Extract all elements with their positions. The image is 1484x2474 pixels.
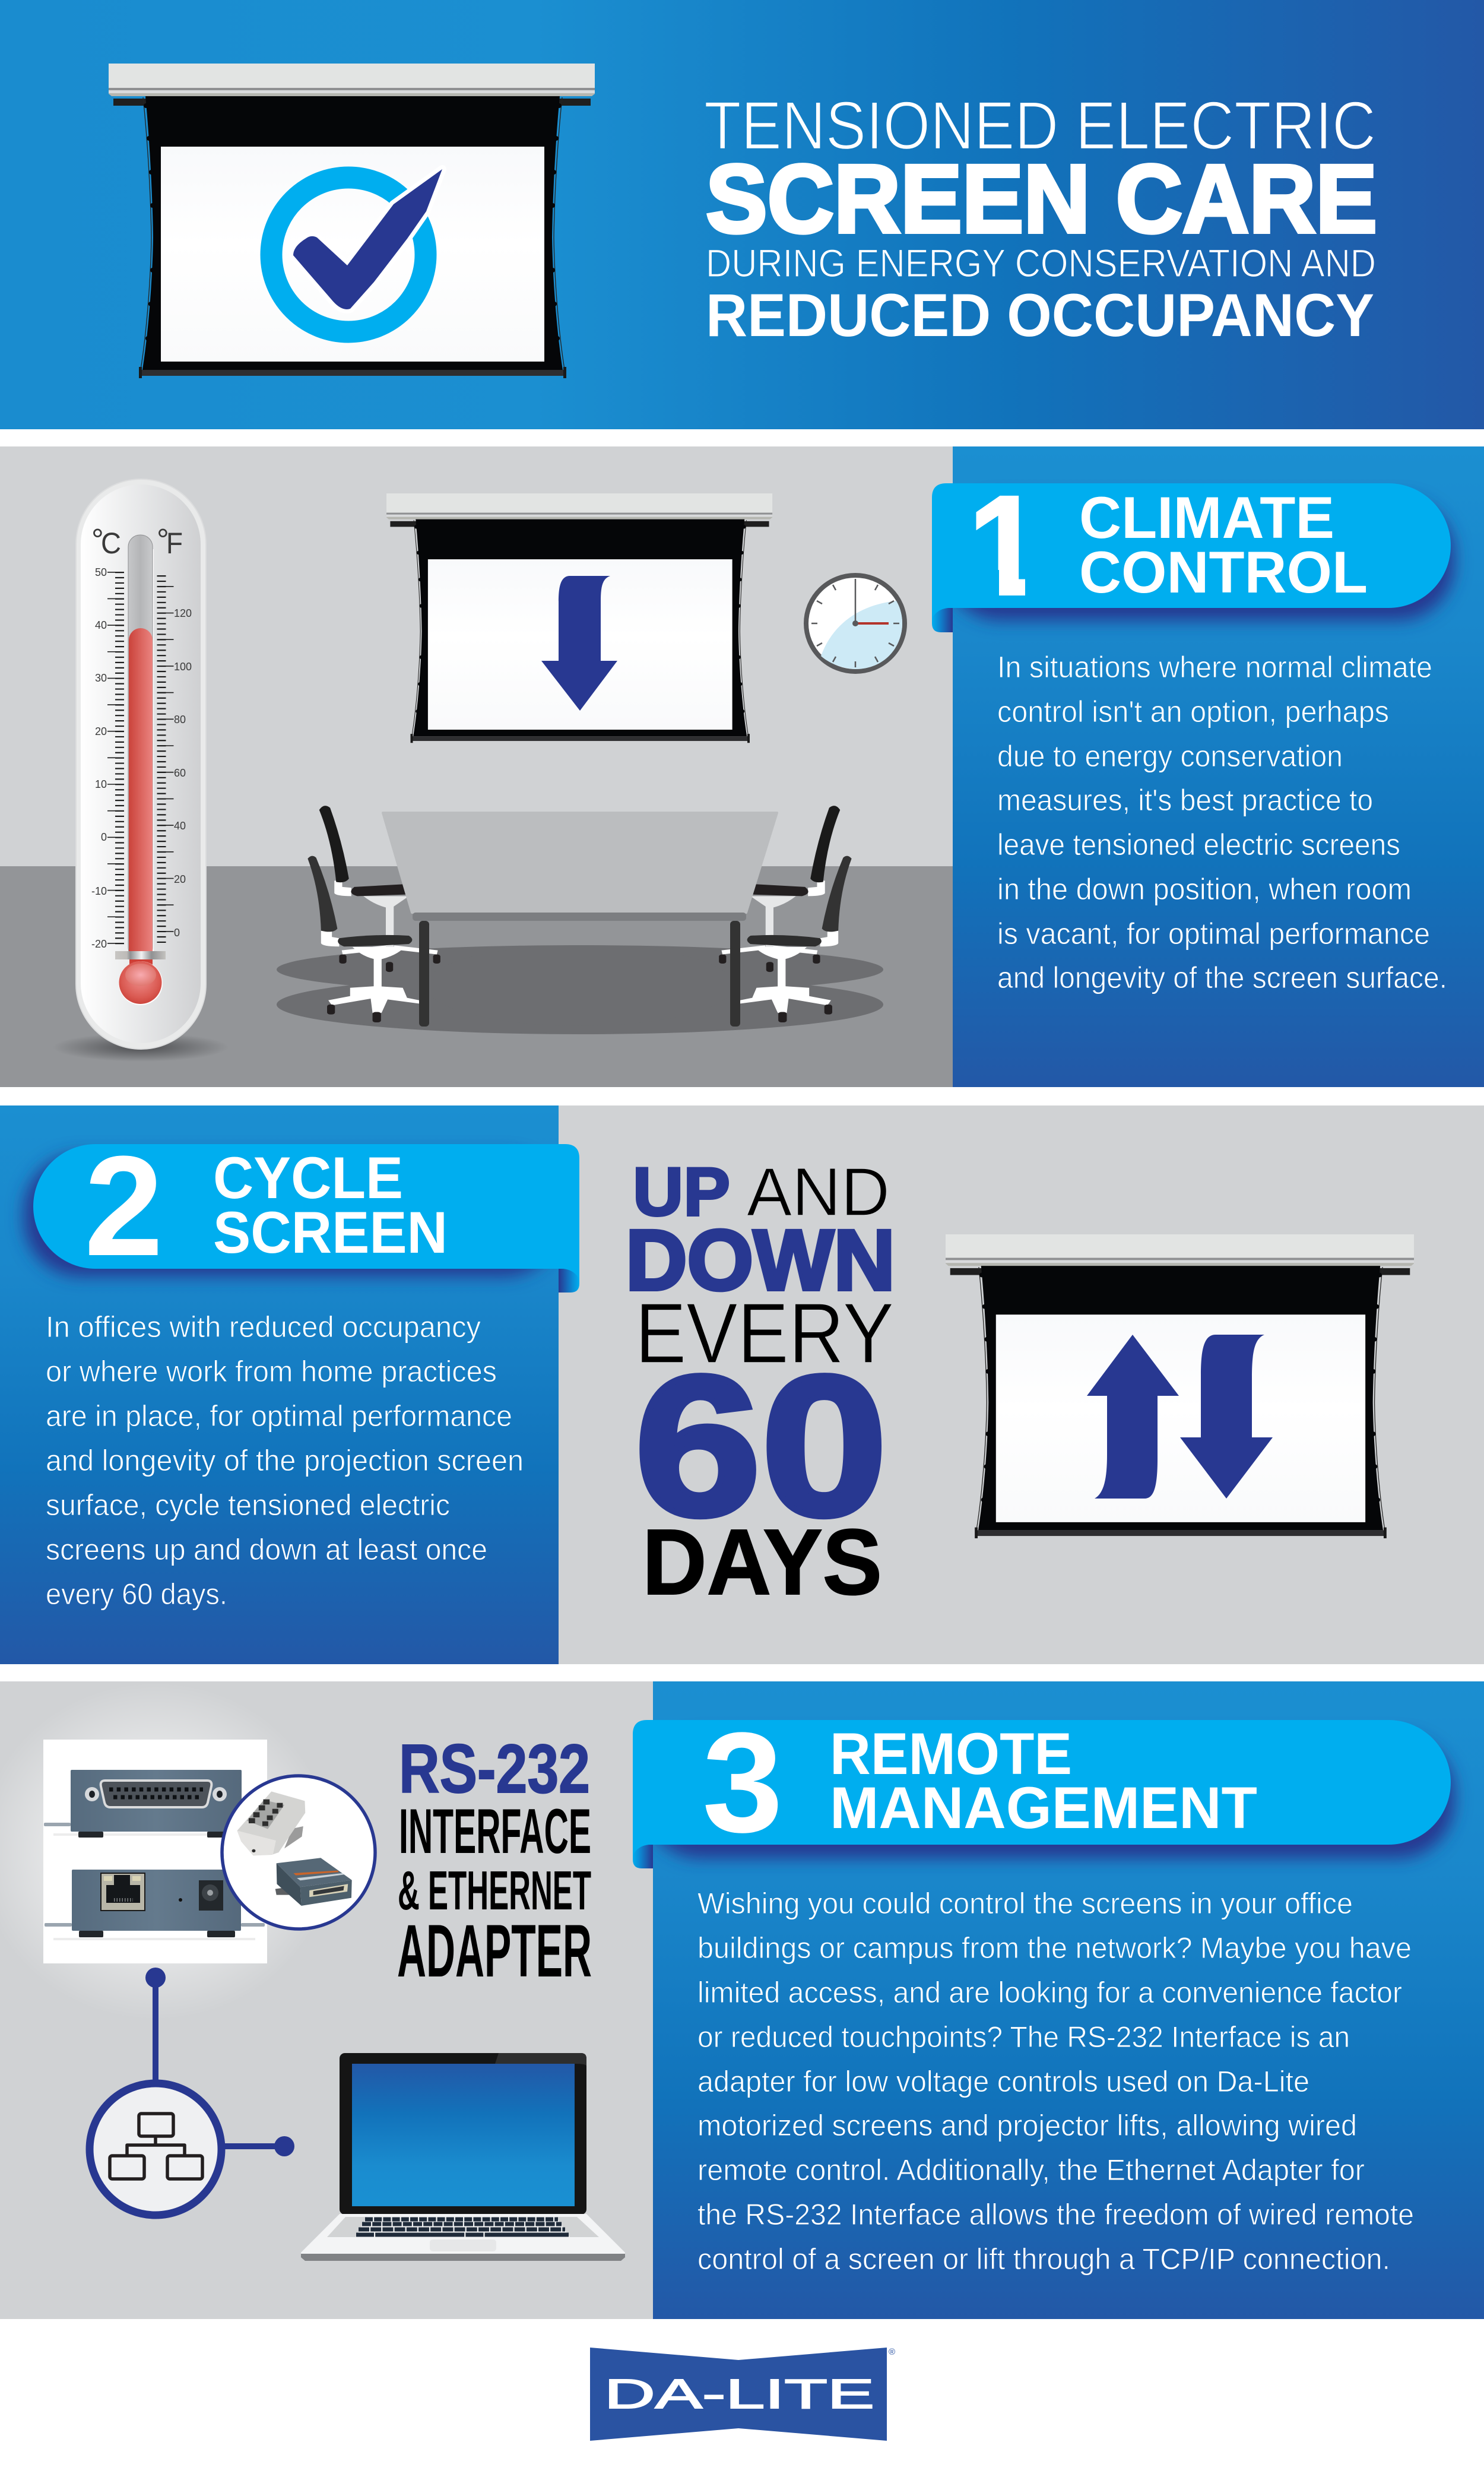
device: serial port <box>44 1770 255 1838</box>
scale labels: 120 <box>174 607 192 619</box>
device: ethernet adapter <box>275 1858 352 1906</box>
floor shadows <box>277 945 883 1034</box>
ribbon shadow <box>944 499 1454 620</box>
body text: climate control: leave tensioned electric screens <box>997 828 1400 861</box>
body text: remote management: or reduced touchpoints? The RS-232 Interface is an <box>697 2020 1350 2054</box>
panel: cycle screen <box>0 1105 1484 1664</box>
ribbon: heading 2: 2 <box>84 1126 163 1285</box>
body text: cycle screen <box>46 1310 524 1611</box>
ribbon: heading 1: 1 <box>968 466 1042 625</box>
scale labels: 30 <box>95 672 107 684</box>
device: ethernet port <box>45 1870 265 1940</box>
chairs left <box>307 806 440 1022</box>
icon: laptop <box>301 2053 625 2261</box>
panel: remote management <box>0 1681 1484 2319</box>
scale labels: 0 <box>101 831 107 843</box>
glow behind product photo <box>0 1682 334 2020</box>
body text: climate control: measures, it's best practice to <box>997 783 1373 817</box>
heading: RS-232 interface and ethernet adapter: & ETHERNET <box>398 1860 591 1921</box>
icon: projection screen with check mark <box>109 64 595 378</box>
scale labels: -10 <box>91 885 107 897</box>
callout: up and down every 60 days: DAYS <box>642 1510 882 1614</box>
title: REDUCED OCCUPANCY <box>706 281 1374 349</box>
body text: climate control: and longevity of the screen surface. <box>997 961 1447 994</box>
scale labels: 20 <box>174 873 186 885</box>
body text: remote management: motorized screens and projector lifts, allowing wired <box>697 2109 1357 2142</box>
chairs right <box>719 806 852 1022</box>
heading: RS-232 interface and ethernet adapter: ADAPTER <box>397 1910 592 1992</box>
callout: up and down every 60 days: DOWN <box>626 1212 895 1308</box>
panel: climate control <box>0 446 1484 1087</box>
section background <box>559 1105 1484 1664</box>
ribbon: heading 1: CONTROL <box>1079 539 1368 605</box>
tick marks <box>116 572 165 945</box>
logo: Da-Lite <box>590 2347 895 2441</box>
scale labels: 60 <box>174 767 186 779</box>
body text: cycle screen: and longevity of the projection screen <box>46 1444 524 1477</box>
arrows: up and down <box>1087 1335 1273 1499</box>
body text: cycle screen: screens up and down at least once <box>46 1533 487 1566</box>
table <box>383 813 777 1027</box>
scale labels: F <box>166 527 183 560</box>
section background <box>0 1681 653 2319</box>
ribbon shadow <box>24 1155 561 1276</box>
scale labels <box>91 523 192 950</box>
heading: RS-232 interface and ethernet adapter: INTERFACE <box>399 1795 591 1867</box>
title: DURING ENERGY CONSERVATION AND <box>706 241 1376 285</box>
ribbon: heading 3: MANAGEMENT <box>830 1775 1257 1841</box>
scale labels: 50 <box>95 566 107 578</box>
scale labels: ° <box>157 523 169 557</box>
ribbon: heading 2: CYCLE <box>213 1145 403 1211</box>
ribbon: heading 3: REMOTE <box>830 1721 1072 1786</box>
body text: remote management: control of a screen or lift through a TCP/IP connection. <box>697 2242 1390 2276</box>
callout: up and down every 60 days: AND <box>747 1154 890 1230</box>
projection screen lowered <box>386 493 772 743</box>
product photo: adapters <box>43 1740 375 1963</box>
body text: climate control <box>997 650 1447 994</box>
scale labels: 20 <box>95 726 107 737</box>
scale labels: 100 <box>174 661 192 673</box>
ribbon: heading 2 <box>33 1126 579 1293</box>
bulb <box>129 957 153 970</box>
scale labels: -20 <box>91 938 107 950</box>
body text: cycle screen: In offices with reduced occupancy <box>46 1310 481 1344</box>
header background <box>0 0 1484 429</box>
body text: remote management: Wishing you could control the screens in your office <box>697 1887 1353 1920</box>
body text: remote management <box>697 1887 1414 2276</box>
body text: remote management: limited access, and are looking for a convenience factor <box>697 1976 1402 2009</box>
ribbon: heading 3: 3 <box>702 1703 783 1862</box>
text panel: climate control <box>932 446 1484 1087</box>
thermometer <box>53 479 229 1062</box>
projection screen <box>946 1234 1414 1538</box>
scale labels: C <box>101 527 121 560</box>
text panel: remote management <box>633 1681 1484 2319</box>
ribbon: heading 1 <box>932 483 1451 632</box>
body text: climate control: control isn't an option, perhaps <box>997 695 1389 728</box>
heading: RS-232 interface and ethernet adapter <box>397 1730 592 1992</box>
body text: cycle screen: or where work from home practices <box>46 1355 497 1388</box>
tube <box>128 535 153 959</box>
ribbon: heading 3 <box>633 1703 1451 1868</box>
scale labels: 40 <box>174 820 186 832</box>
icon: network <box>90 2083 221 2215</box>
ribbon: heading 2: SCREEN <box>213 1199 448 1265</box>
scale labels: 10 <box>95 778 107 790</box>
callout: up and down every 60 days: UP <box>633 1154 730 1230</box>
device: interface box <box>237 1791 305 1855</box>
chairs and table <box>307 806 852 1027</box>
body text: remote management: buildings or campus from the network? Maybe you have <box>697 1931 1412 1965</box>
scale labels: ° <box>91 523 104 557</box>
body text: remote management: adapter for low voltage controls used on Da-Lite <box>697 2065 1309 2098</box>
heading: RS-232 interface and ethernet adapter: RS-232 <box>399 1730 590 1807</box>
body text: remote management: remote control. Additionally, the Ethernet Adapter for <box>697 2153 1365 2187</box>
callout: up and down every 60 days <box>626 1154 895 1614</box>
clock <box>806 575 905 671</box>
inset circle <box>222 1776 375 1929</box>
callout: up and down every 60 days: EVERY <box>635 1285 894 1381</box>
body text: cycle screen: are in place, for optimal performance <box>46 1399 512 1433</box>
title: SCREEN CARE <box>706 144 1377 253</box>
body text: climate control: is vacant, for optimal performance <box>997 917 1430 951</box>
arrow: down <box>541 576 617 711</box>
scale labels: 0 <box>174 927 180 939</box>
body text: climate control: In situations where normal climate <box>997 650 1432 684</box>
scale labels: 40 <box>95 619 107 631</box>
room illustration background <box>0 446 953 1087</box>
body text: cycle screen: surface, cycle tensioned electric <box>46 1488 450 1522</box>
callout: up and down every 60 days: 60 <box>635 1335 887 1557</box>
body text: climate control: due to energy conservation <box>997 739 1343 773</box>
ribbon: heading 1: CLIMATE <box>1079 484 1334 550</box>
text panel: cycle screen <box>0 1105 579 1664</box>
title: TENSIONED ELECTRIC <box>704 88 1376 164</box>
body text: cycle screen: every 60 days. <box>46 1577 227 1611</box>
header panel <box>0 0 1484 429</box>
ribbon shadow <box>644 1737 1454 1858</box>
title <box>704 88 1377 349</box>
connector lines <box>145 1968 294 2156</box>
logo: Da-Lite: ® <box>889 2347 895 2357</box>
logo: Da-Lite: DA-LITE <box>604 2371 874 2417</box>
scale labels: 80 <box>174 714 186 726</box>
body text: climate control: in the down position, when room <box>997 872 1412 906</box>
body text: remote management: the RS-232 Interface allows the freedom of wired remote <box>697 2198 1414 2231</box>
